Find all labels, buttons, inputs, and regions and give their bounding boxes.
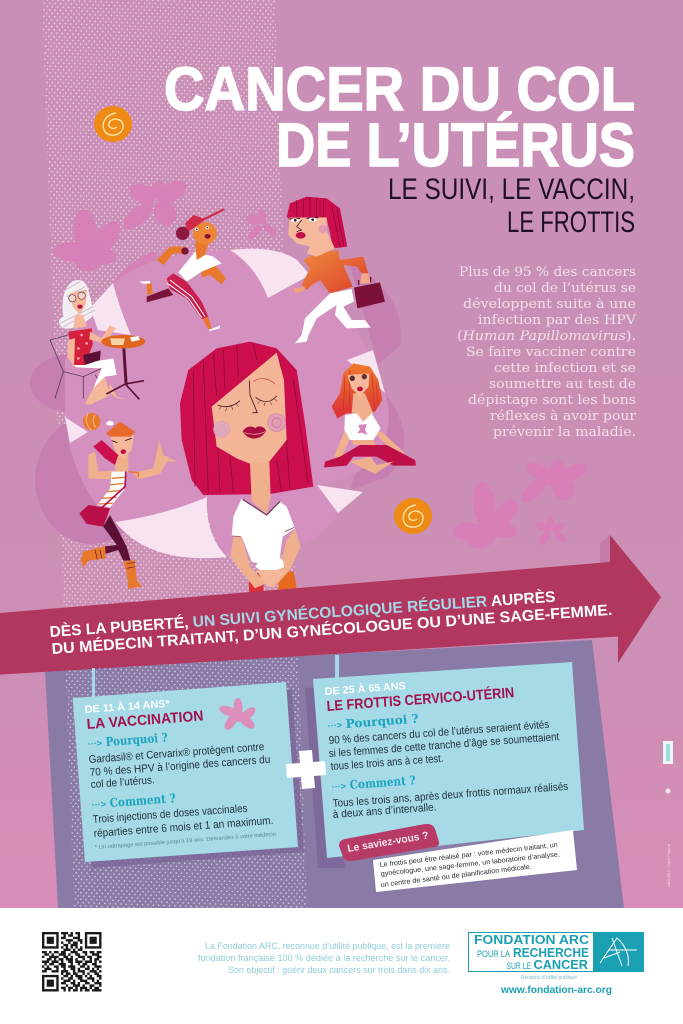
callout: le saviez-vous note: gynécologue, une sage-femme, un laboratoire d’analyse, bbox=[380, 851, 560, 878]
logo: Fondation ARC: SUR LE bbox=[506, 961, 531, 971]
pill: le saviez-vous bbox=[339, 824, 439, 861]
website: www.fondation-arc.org bbox=[500, 985, 612, 996]
pale highlight shapes bbox=[65, 249, 385, 558]
intro text block: dépistage sont les bons bbox=[468, 393, 636, 408]
flowers on dotted band bbox=[54, 176, 279, 293]
character: main woman with heart hands bbox=[180, 342, 313, 594]
panel: vaccination: Trois injections de doses vaccinales bbox=[92, 803, 248, 826]
subtitle: LE FROTTIS bbox=[507, 206, 635, 239]
intro text block: réflexes à avoir pour bbox=[490, 409, 637, 424]
icon: plus sign bbox=[286, 750, 326, 789]
title bbox=[164, 55, 635, 179]
footer text: Son objectif : guérir deux cancers sur trois dans dix ans. bbox=[228, 965, 450, 976]
intro text block: prévenir la maladie. bbox=[493, 425, 636, 440]
panel: vaccination: Pourquoi ? bbox=[105, 730, 168, 749]
footer band bbox=[0, 908, 683, 1024]
arrow banner bbox=[0, 535, 661, 675]
panel: frottis: Pourquoi ? bbox=[345, 712, 419, 731]
footer text: La Fondation ARC, reconnue d’utilité publique, est la première bbox=[205, 941, 450, 952]
panel: vaccination: * Un rattrapage est possible jusqu’à 19 ans. Demandez à votre médecin. bbox=[95, 832, 278, 851]
icon: pink star flower bbox=[218, 698, 258, 732]
intro text block: Plus de 95 % des cancers bbox=[459, 265, 636, 280]
panel: frottis: si les femmes de cette tranche d’âge se soumettaient bbox=[328, 731, 560, 760]
intro text block: soumettre au test de bbox=[489, 377, 636, 392]
logo caption: Reconnu d’utilité publique bbox=[521, 975, 577, 981]
character: meditating woman bbox=[324, 363, 416, 474]
panel: vaccination: Gardasil® et Cervarix® protègent contre bbox=[88, 741, 265, 766]
panel: frottis bbox=[305, 662, 584, 868]
panel: vaccination: ···> bbox=[91, 799, 106, 810]
intro text block: (Human Papillomavirus ). bbox=[457, 329, 636, 344]
footer text: fondation française 100 % dédiée à la recherche sur le cancer. bbox=[198, 953, 450, 964]
icon: orange spiral top bbox=[94, 106, 132, 142]
title: DE L’UTÉRUS bbox=[276, 111, 635, 179]
callout: le saviez-vous note bbox=[339, 824, 577, 892]
side print mark bbox=[663, 741, 673, 888]
subtitle bbox=[388, 173, 635, 239]
logo: Fondation ARC bbox=[468, 932, 644, 972]
logo: Fondation ARC: FONDATION ARC bbox=[474, 932, 590, 947]
panel: frottis: LE FROTTIS CERVICO-UTÉRIN bbox=[326, 684, 515, 715]
panel: vaccination: Comment ? bbox=[109, 791, 176, 810]
intro text block bbox=[457, 265, 637, 440]
panel: frottis: DE 25 À 65 ANS bbox=[324, 679, 406, 698]
illustration blobs bbox=[30, 249, 404, 560]
panel: frottis: ···> bbox=[331, 781, 346, 792]
footer text bbox=[198, 941, 450, 976]
character: dancing woman bbox=[79, 413, 177, 589]
panel: vaccination: 70 % des HPV à l’origine des cancers du bbox=[89, 754, 271, 779]
panel: vaccination: DE 11 À 14 ANS* bbox=[84, 697, 171, 716]
flowers lower right bbox=[452, 459, 591, 550]
panel: vaccination: ···> bbox=[87, 738, 102, 749]
logo: Fondation ARC: POUR LA bbox=[477, 949, 510, 959]
intro text block: du col de l’utérus se bbox=[494, 281, 636, 296]
title: CANCER DU COL bbox=[164, 55, 635, 123]
panel: frottis: à deux ans d’intervalle. bbox=[332, 801, 437, 821]
logo: Fondation ARC: RECHERCHE bbox=[513, 945, 589, 960]
QR code bbox=[42, 933, 102, 990]
panel: frottis: ···> bbox=[327, 720, 342, 731]
intro text block: Se faire vacciner contre bbox=[466, 345, 636, 360]
intro text block: développent suite à une bbox=[463, 297, 636, 312]
panel: frottis: Tous les trois ans, après deux frottis normaux réalisés bbox=[332, 781, 569, 810]
logo: Fondation ARC: CANCER bbox=[534, 957, 589, 972]
panel: frottis: 90 % des cancers du col de l’utérus seraient évités bbox=[328, 719, 550, 747]
icon: orange spiral bottom bbox=[394, 498, 432, 534]
panel: vaccination bbox=[73, 655, 339, 868]
icon: logo mark bbox=[600, 938, 637, 966]
banner line 1: DÈS LA PUBERTÉ, UN SUIVI GYNÉCOLOGIQUE RÉGULIER AUPRÈS bbox=[49, 589, 556, 641]
character: business woman with bag bbox=[287, 197, 385, 343]
side print mark: Juillet 2016 – Carré Papyrus bbox=[667, 844, 671, 888]
dotted vertical band bbox=[42, 0, 307, 908]
panel: frottis: Comment ? bbox=[349, 773, 416, 792]
character: runner with cap bbox=[139, 208, 226, 331]
intro text block: cette infection et se bbox=[494, 361, 636, 376]
panel: frottis: tous les trois ans à ce test. bbox=[330, 753, 444, 773]
intro text block: infection par des HPV bbox=[478, 313, 637, 328]
panel: vaccination: col de l’utérus. bbox=[90, 774, 155, 791]
callout: le saviez-vous note: un centre de santé ou de planification médicale. bbox=[380, 864, 532, 889]
character: woman at cafe table bbox=[50, 280, 145, 405]
pill: le saviez-vous: Le saviez-vous ? bbox=[347, 830, 429, 855]
callout: le saviez-vous note: Le frottis peut être réalisé par : votre médecin traitant, un bbox=[379, 842, 558, 869]
panel: vaccination: réparties entre 6 mois et 1 an maximum. bbox=[93, 815, 274, 840]
banner line 2: DU MÉDECIN TRAITANT, D’UN GYNÉCOLOGUE OU D’UNE SAGE-FEMME. bbox=[51, 602, 613, 658]
purple lower panel bbox=[45, 640, 624, 908]
panel: vaccination: LA VACCINATION bbox=[86, 708, 204, 733]
